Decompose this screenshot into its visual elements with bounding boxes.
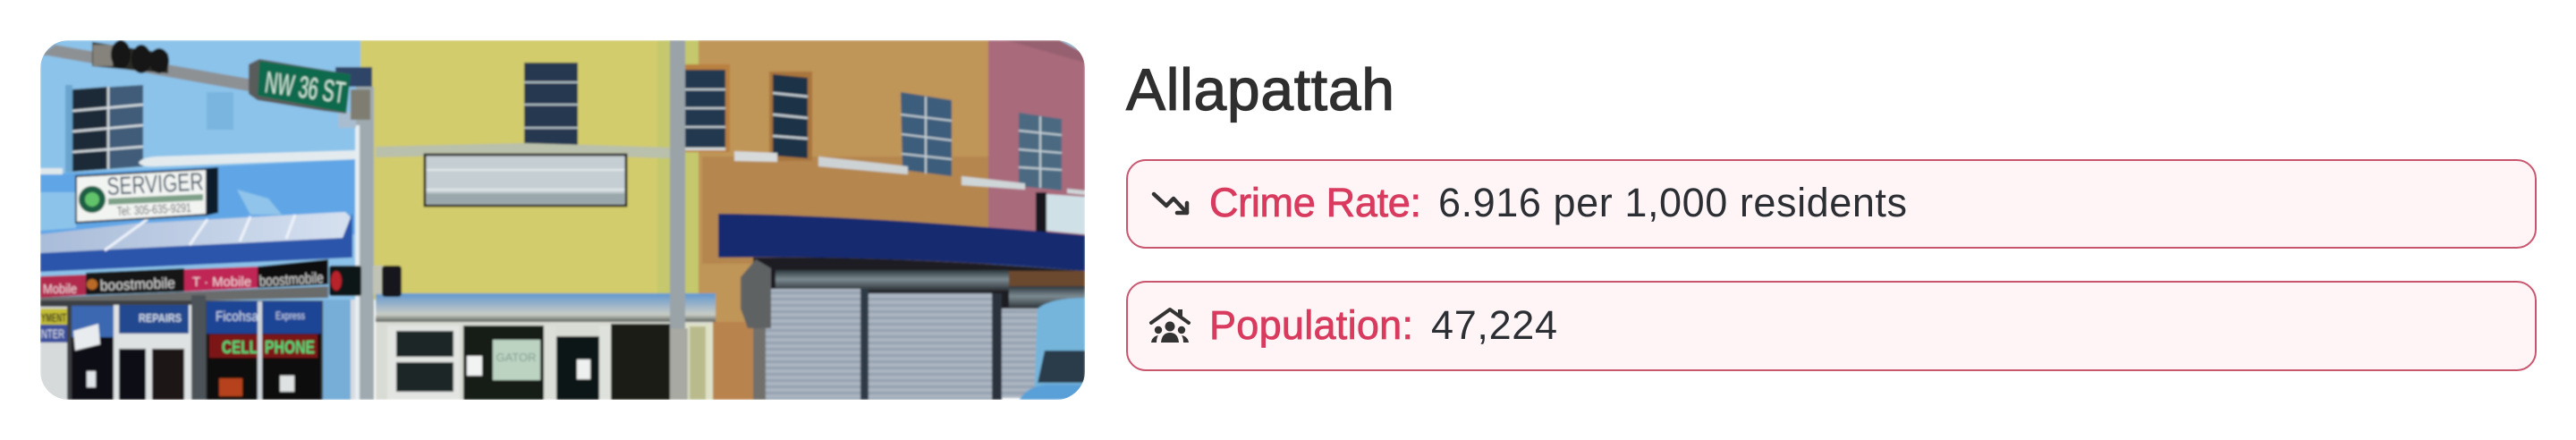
- Serviger shop sign: [76, 167, 218, 223]
- value: population: 47,224: [1431, 302, 1557, 348]
- card background: [1127, 160, 2536, 248]
- parking meter box: [741, 259, 771, 328]
- storefront left: CELL: [222, 338, 258, 358]
- photo: Allapattah street corner: [40, 40, 1085, 400]
- crime rate card: [1127, 160, 2536, 248]
- utility pole: [670, 40, 688, 400]
- pedestrian signals: [329, 266, 402, 297]
- store signs band: Mobile: [43, 282, 77, 297]
- store signs band: [40, 259, 328, 304]
- label: Population: Population:: [1209, 302, 1413, 348]
- icon: house with people: [1151, 309, 1189, 343]
- label: Crime Rate: Crime Rate:: [1209, 180, 1421, 225]
- blue awning right: [718, 214, 1085, 271]
- blue awning left: [40, 212, 352, 272]
- Serviger shop sign: SERVIGER: [106, 167, 204, 200]
- storefront left: Ficohsa: [216, 309, 258, 325]
- orange building: [685, 40, 990, 400]
- card background: [1127, 282, 2536, 370]
- traffic signal arm and lights: [40, 40, 249, 91]
- title: Allapattah: Allapattah: [1126, 56, 1394, 123]
- yellow building storefront: [376, 293, 753, 400]
- population card: [1127, 282, 2536, 370]
- roll-down shutters: [753, 258, 1085, 400]
- storefront left: NTER: [41, 326, 64, 341]
- store signs band: boostmobile: [258, 269, 324, 290]
- yellow building: [360, 40, 700, 300]
- store signs band: T · Mobile: [192, 275, 251, 290]
- van: [1020, 298, 1085, 400]
- street sign: NW 36 ST: NW 36 ST: [263, 65, 347, 110]
- icon: trending down arrow: [1154, 194, 1187, 213]
- traffic signal pole: [335, 67, 374, 400]
- Serviger shop sign: Tel: 305-635-9291: [116, 200, 191, 218]
- storefront left: PHONE: [265, 338, 315, 358]
- storefront left: [40, 295, 360, 400]
- value: crime rate: 6.916 per 1,000 residents: [1438, 180, 1907, 225]
- blue building: [40, 40, 362, 309]
- street sign: NW 36 ST: [249, 59, 351, 114]
- storefront left: Express: [275, 309, 305, 322]
- yellow building storefront: GATOR: [496, 351, 537, 364]
- store signs band: boostmobile: [99, 275, 175, 294]
- storefront left: REPAIRS: [139, 311, 182, 325]
- pink building: [962, 40, 1085, 239]
- storefront left: YMENT: [41, 310, 66, 325]
